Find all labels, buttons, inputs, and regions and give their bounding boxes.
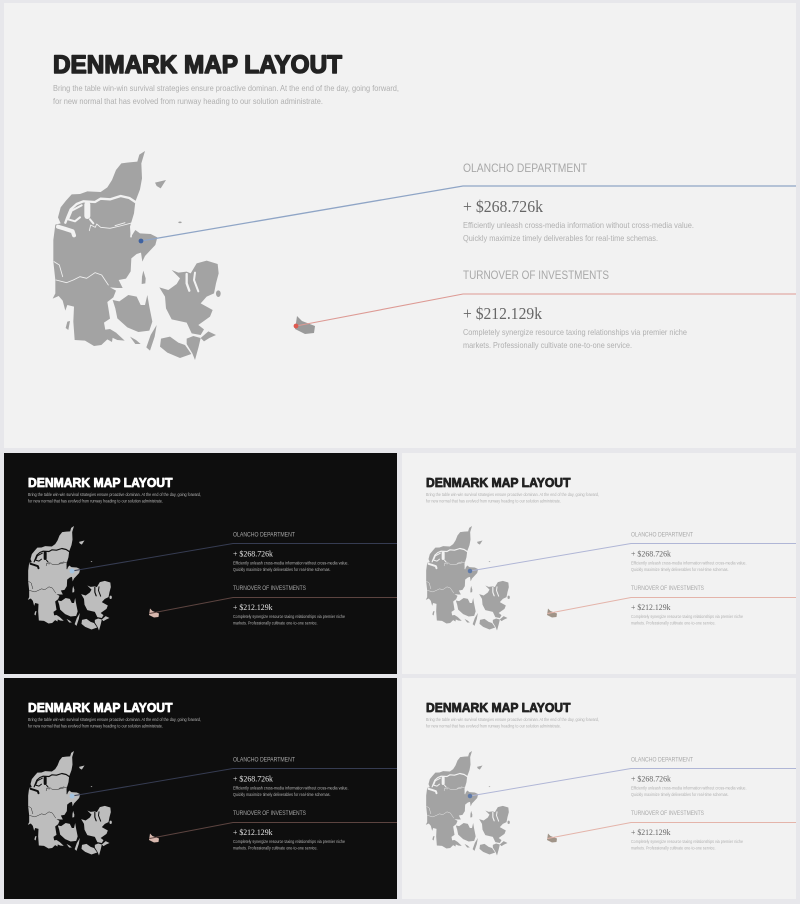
subtitle: Bring the table win-win survival strategies ensure proactive dominan. At the end of the day, going forward,: [426, 492, 599, 497]
value: Turnover: + $212.129k: [631, 827, 671, 837]
description: Olancho: Efficiently unleash cross-media information without cross-media value.: [631, 786, 746, 790]
value: Olancho: + $268.726k: [463, 197, 543, 216]
subtitle: [426, 492, 599, 504]
map of Denmark: [28, 526, 112, 630]
description: Turnover: [233, 839, 346, 850]
map of Denmark: [28, 751, 112, 855]
island highlight: [149, 608, 159, 618]
connector dot: blue: [70, 794, 74, 798]
description: Turnover: markets. Professionally cultivate one-to-one service.: [463, 340, 632, 350]
description: Turnover: Completely synergize resource taxing relationships via premier niche: [631, 614, 744, 619]
description: Turnover: markets. Professionally cultivate one-to-one service.: [233, 620, 318, 626]
title: DENMARK MAP LAYOUT: [53, 51, 342, 79]
subtitle: [53, 83, 399, 106]
description: Olancho: Quickly maximize timely deliverables for real-time schemas.: [463, 233, 658, 243]
connector dot: blue: [468, 569, 472, 573]
subtitle: [28, 492, 201, 504]
description: Turnover: Completely synergize resource taxing relationships via premier niche: [631, 839, 744, 844]
description: Olancho: Efficiently unleash cross-media information without cross-media value.: [233, 560, 348, 566]
subtitle: [426, 717, 599, 728]
island highlight: [547, 608, 557, 618]
label: Olancho: OLANCHO DEPARTMENT: [233, 758, 295, 764]
connector: blue: [72, 544, 397, 571]
map of Denmark: [426, 751, 510, 855]
description: Turnover: Completely synergize resource taxing relationships via premier niche: [233, 614, 346, 619]
label: Turnover: TURNOVER OF INVESTMENTS: [233, 586, 306, 592]
description: Turnover: [631, 839, 744, 850]
panel: dark slide bottom: [4, 678, 397, 899]
connector dot: blue: [70, 568, 74, 574]
title: DENMARK MAP LAYOUT: [426, 701, 571, 715]
subtitle: Bring the table win-win survival strategies ensure proactive dominan. At the end of the day, going forward,: [28, 492, 201, 497]
panel: light slide bottom: [402, 678, 796, 899]
value: Olancho: + $268.726k: [233, 548, 274, 558]
description: Olancho: [631, 786, 746, 797]
connector: blue: [72, 768, 397, 796]
description: Olancho: [233, 560, 348, 572]
label: Olancho: OLANCHO DEPARTMENT: [631, 758, 693, 764]
description: Turnover: markets. Professionally cultivate one-to-one service.: [233, 846, 318, 850]
connector: red: [548, 598, 796, 614]
panel: main light slide: [4, 3, 796, 448]
description: Olancho: Quickly maximize timely deliverables for real-time schemas.: [631, 567, 728, 572]
description: Olancho: Efficiently unleash cross-media information without cross-media value.: [233, 786, 348, 790]
label: Turnover: TURNOVER OF INVESTMENTS: [233, 811, 306, 817]
subtitle: Bring the table win-win survival strategies ensure proactive dominan. At the end of the day, going forward,: [28, 717, 201, 722]
subtitle: for new normal that has evolved from runway heading to our solution administrate.: [426, 724, 561, 728]
connector: red: [548, 822, 796, 838]
subtitle: for new normal that has evolved from runway heading to our solution administrate.: [426, 498, 561, 504]
connector: blue: [470, 768, 796, 796]
value: Olancho: + $268.726k: [631, 774, 672, 784]
subtitle: Bring the table win-win survival strategies ensure proactive dominan. At the end of the day, going forward,: [53, 83, 399, 93]
connector: blue: [141, 186, 796, 241]
connector: red: [150, 822, 397, 838]
description: Turnover: markets. Professionally cultivate one-to-one service.: [631, 846, 716, 850]
description: Turnover: [463, 327, 687, 350]
map of Denmark: [53, 151, 221, 360]
label: Turnover: TURNOVER OF INVESTMENTS: [631, 811, 704, 817]
label: Olancho: OLANCHO DEPARTMENT: [631, 532, 693, 538]
description: Turnover: [631, 614, 744, 626]
value: Olancho: + $268.726k: [233, 774, 274, 784]
connector dot: blue: [139, 239, 143, 243]
connector: blue: [470, 544, 796, 571]
description: Olancho: Quickly maximize timely deliverables for real-time schemas.: [233, 792, 330, 797]
description: Turnover: [233, 614, 346, 626]
description: Olancho: Efficiently unleash cross-media information without cross-media value.: [631, 560, 746, 566]
island highlight: [149, 834, 159, 842]
description: Turnover: markets. Professionally cultivate one-to-one service.: [631, 620, 716, 626]
value: Turnover: + $212.129k: [631, 602, 671, 612]
description: Turnover: Completely synergize resource taxing relationships via premier niche: [233, 839, 346, 844]
description: Olancho: [233, 786, 348, 797]
subtitle: for new normal that has evolved from runway heading to our solution administrate.: [28, 498, 163, 504]
subtitle: for new normal that has evolved from runway heading to our solution administrate.: [28, 724, 163, 728]
title: DENMARK MAP LAYOUT: [28, 476, 173, 490]
panel: dark slide top: [4, 453, 397, 674]
title: DENMARK MAP LAYOUT: [426, 476, 571, 490]
panel: light slide top: [402, 453, 796, 674]
description: Olancho: [463, 220, 694, 243]
description: Olancho: Quickly maximize timely deliverables for real-time schemas.: [233, 567, 330, 572]
island highlight: [295, 316, 315, 334]
description: Olancho: Quickly maximize timely deliverables for real-time schemas.: [631, 792, 728, 797]
value: Turnover: + $212.129k: [463, 304, 542, 323]
description: Turnover: Completely synergize resource taxing relationships via premier niche: [463, 327, 687, 337]
map of Denmark: [426, 526, 510, 630]
description: Olancho: Efficiently unleash cross-media information without cross-media value.: [463, 220, 694, 230]
connector dot: blue: [468, 794, 472, 798]
label: Olancho: OLANCHO DEPARTMENT: [463, 161, 588, 175]
value: Turnover: + $212.129k: [233, 827, 273, 837]
subtitle: [28, 717, 201, 728]
value: Turnover: + $212.129k: [233, 602, 273, 612]
connector: red: [150, 598, 397, 614]
label: Turnover: TURNOVER OF INVESTMENTS: [631, 586, 704, 592]
label: Turnover: TURNOVER OF INVESTMENTS: [463, 268, 609, 282]
value: Olancho: + $268.726k: [631, 548, 672, 558]
description: Olancho: [631, 560, 746, 572]
connector dot: red: [294, 324, 298, 328]
title: DENMARK MAP LAYOUT: [28, 701, 173, 715]
connector: red: [296, 294, 796, 326]
label: Olancho: OLANCHO DEPARTMENT: [233, 532, 295, 538]
subtitle: Bring the table win-win survival strategies ensure proactive dominan. At the end of the day, going forward,: [426, 717, 599, 722]
subtitle: for new normal that has evolved from runway heading to our solution administrate.: [53, 96, 323, 106]
island highlight: [547, 834, 557, 842]
